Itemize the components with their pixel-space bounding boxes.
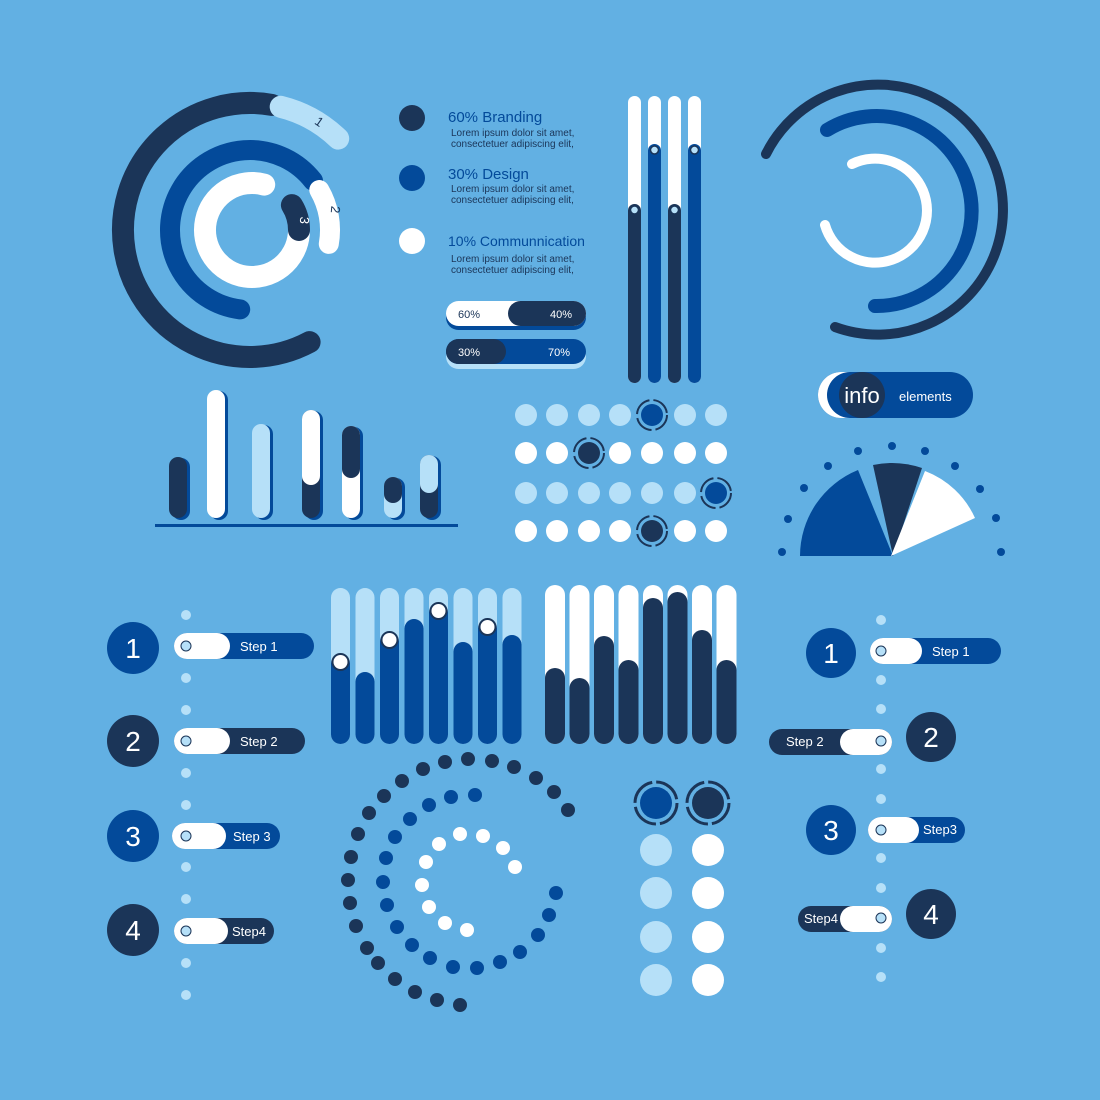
segment labels <box>297 113 343 225</box>
legend item: branding: consectetuer adipiscing elit, <box>451 139 574 150</box>
pill 30/70: 30% <box>458 347 480 359</box>
step 4 right <box>798 889 956 939</box>
legend item: design: consectetuer adipiscing elit, <box>451 195 574 206</box>
legend item: design <box>399 165 574 206</box>
step 2: Step 2 <box>240 734 278 749</box>
badge: info elements: info <box>844 383 880 408</box>
panel: top-left ring chart <box>123 103 343 357</box>
step 2 <box>107 715 305 767</box>
chart: navy bar chart <box>545 585 736 744</box>
navy segment 3 <box>292 205 299 230</box>
step 1 right: 1 <box>823 638 839 669</box>
step 3 right <box>806 805 965 855</box>
step 3 right: 3 <box>823 815 839 846</box>
legend item: branding: Lorem ipsum dolor sit amet, <box>451 128 574 139</box>
panel: top-right ring chart <box>766 85 1003 335</box>
step 1 right <box>806 628 1001 678</box>
pill 60/40: 60% <box>458 309 480 321</box>
blue middle arc <box>170 150 313 309</box>
step 3: Step 3 <box>233 829 271 844</box>
step 2: 2 <box>125 726 141 757</box>
segment labels: 2 <box>328 205 343 214</box>
legend item: communication <box>399 228 585 276</box>
panel: legend <box>399 105 585 276</box>
segment labels: 3 <box>297 216 312 225</box>
badge: info elements <box>818 372 973 418</box>
connector dots left <box>181 610 191 1000</box>
step 4 <box>107 904 274 956</box>
chart: blue bar chart <box>331 588 522 744</box>
step 2 right: 2 <box>923 722 939 753</box>
badge: info elements: elements <box>899 389 952 404</box>
chart: dot columns <box>635 782 729 996</box>
legend item: branding <box>399 105 574 150</box>
chart: pie fan <box>778 442 1005 556</box>
light segment 1 <box>281 107 338 139</box>
pill 30/70: 70% <box>548 347 570 359</box>
panel: percent pills <box>446 301 586 369</box>
legend item: design: 30% Design <box>448 166 529 183</box>
step 4 right: Step4 <box>804 911 838 926</box>
step 1: 1 <box>125 633 141 664</box>
chart: dot grid <box>515 400 731 546</box>
connector dots right <box>876 615 886 982</box>
legend item: communication: 10% Communnication <box>448 233 585 249</box>
step 3: 3 <box>125 821 141 852</box>
pill 30/70 <box>446 339 586 369</box>
step 4: 4 <box>125 915 141 946</box>
step 1: Step 1 <box>240 639 278 654</box>
step 4 right: 4 <box>923 899 939 930</box>
chart: left bar chart <box>155 390 458 527</box>
pill 60/40 <box>446 301 586 330</box>
legend item: branding: 60% Branding <box>448 109 542 126</box>
legend item: design: Lorem ipsum dolor sit amet, <box>451 184 574 195</box>
step 3 right: Step3 <box>923 822 957 837</box>
outer navy arc <box>123 103 310 357</box>
step 1 right: Step 1 <box>932 644 970 659</box>
step 2 right <box>769 712 956 762</box>
step 2 right: Step 2 <box>786 734 824 749</box>
legend item: communication: Lorem ipsum dolor sit amet, <box>451 254 574 265</box>
step 4: Step4 <box>232 924 266 939</box>
chart: top vertical bars <box>628 96 701 383</box>
panel: right steps <box>769 615 1001 982</box>
segment labels: 1 <box>312 113 327 130</box>
pill 60/40: 40% <box>550 309 572 321</box>
white segment 2 <box>319 190 330 244</box>
chart: dotted spiral <box>341 752 575 1012</box>
step 1 <box>107 622 314 674</box>
panel: left steps <box>107 610 314 1000</box>
inner white arc <box>205 183 299 277</box>
legend item: communication: consectetuer adipiscing elit, <box>451 265 574 276</box>
step 3 <box>107 810 280 862</box>
